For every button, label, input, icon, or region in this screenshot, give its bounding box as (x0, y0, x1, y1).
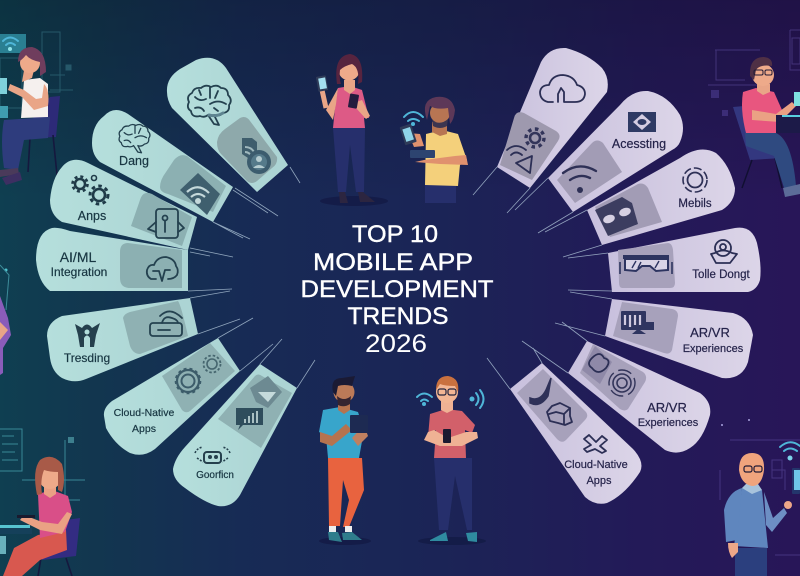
panel: right 7 Cloud-Native (510, 363, 641, 504)
panel: left 1 brain (167, 58, 288, 192)
icon: gears (72, 176, 108, 204)
text: Cloud-Native Apps: Cloud-Native (564, 459, 628, 471)
text: Cloud-Native Apps (564, 459, 628, 487)
title: TRENDS (348, 303, 448, 330)
person: man with tablet and wifi (400, 97, 468, 203)
icon: chart bubble (236, 408, 263, 430)
icon: console (621, 311, 654, 334)
text: Integration: Integration (51, 265, 107, 279)
person: partial figure left edge (0, 265, 11, 375)
panel: left 2 Dang (92, 110, 233, 222)
title (300, 221, 494, 358)
panel: right 2 Acessting (548, 91, 683, 212)
text: Goorficn: Goorficn (196, 470, 234, 481)
left top tech backdrop (0, 32, 73, 108)
icon: wifi (563, 166, 596, 193)
icon: device (148, 209, 184, 238)
text: Cloud-Native Apps (114, 407, 175, 435)
person: seated woman top left (0, 34, 60, 185)
icon: dark card eyes (595, 197, 638, 236)
text: Acessting: Acessting (612, 137, 666, 151)
text: Experiences: Experiences (638, 417, 699, 429)
icon: robot (195, 447, 230, 463)
icon: swirl (530, 378, 551, 404)
panel: left 3 Anps (50, 160, 197, 250)
icon: rss and user badge (242, 138, 271, 174)
icon: gear (526, 129, 544, 147)
icon: brain (119, 125, 150, 153)
spike lines left (188, 167, 315, 388)
spike lines right (473, 167, 612, 389)
icon: wifi diamond (180, 173, 220, 215)
text: Dang: Dang (119, 154, 149, 168)
icon: router with signal (150, 311, 182, 336)
icon: small gear (204, 356, 220, 372)
text: Tresding: Tresding (64, 351, 110, 365)
text: Cloud-Native Apps: Apps (586, 475, 612, 487)
person: man with phone and signals bottom right of center (417, 376, 486, 545)
text: Anps: Anps (78, 209, 106, 223)
text: AR/VR: AR/VR (690, 325, 730, 340)
panel: left 4 AI/ML Integration (36, 228, 188, 291)
icon: cross (584, 435, 607, 453)
icon: brain (188, 86, 231, 125)
text: AI/ML: AI/ML (60, 249, 96, 265)
icon: cluster (582, 346, 612, 384)
panel: left 7 Goorficn (173, 364, 297, 506)
icon: target (683, 168, 707, 192)
icon: tool badge (75, 323, 100, 347)
text: Tolle Dongt: Tolle Dongt (692, 269, 751, 281)
icon: cloud (540, 75, 585, 102)
panel: right 3 Mebils (587, 149, 735, 245)
icon: large gear (176, 368, 200, 394)
icon: person in ring (711, 240, 737, 263)
title: 2026 (365, 330, 427, 358)
text: Mebils: Mebils (678, 198, 712, 210)
text: AR/VR: AR/VR (647, 400, 687, 415)
icon: cloud pulse (147, 257, 178, 281)
person: man with tablet bottom left of center (319, 376, 371, 545)
icon: target ring (609, 370, 635, 396)
panel: left 6 Cloud-Native (104, 338, 240, 455)
panel: left 5 Tresding (47, 298, 198, 381)
panel: right 4 Tolle Dongt (608, 228, 761, 292)
icon: blocks (547, 403, 572, 425)
title: TOP 10 (352, 221, 438, 248)
person: seated woman bottom left with data screen (0, 429, 85, 576)
title: MOBILE APP (313, 249, 473, 276)
icon: wifi and play (507, 146, 532, 173)
icon: mask (250, 376, 282, 408)
text: Cloud-Native Apps: Cloud-Native (114, 407, 175, 419)
title: DEVELOPMENT (300, 276, 494, 303)
right top tech backdrop (708, 30, 800, 116)
icon: VR headset (620, 255, 672, 274)
panel: right 6 AR/VR Experiences (568, 341, 710, 453)
panel: right 5 AR/VR Experiences (605, 299, 753, 378)
person: standing man bottom right with device (720, 419, 800, 576)
icon: node square (628, 112, 656, 132)
person: seated man top right (733, 57, 800, 197)
text: Cloud-Native Apps: Apps (132, 423, 156, 435)
person: woman with phones top center (316, 54, 388, 206)
text: Experiences: Experiences (683, 343, 744, 355)
panel: right 1 cloud (497, 48, 608, 188)
